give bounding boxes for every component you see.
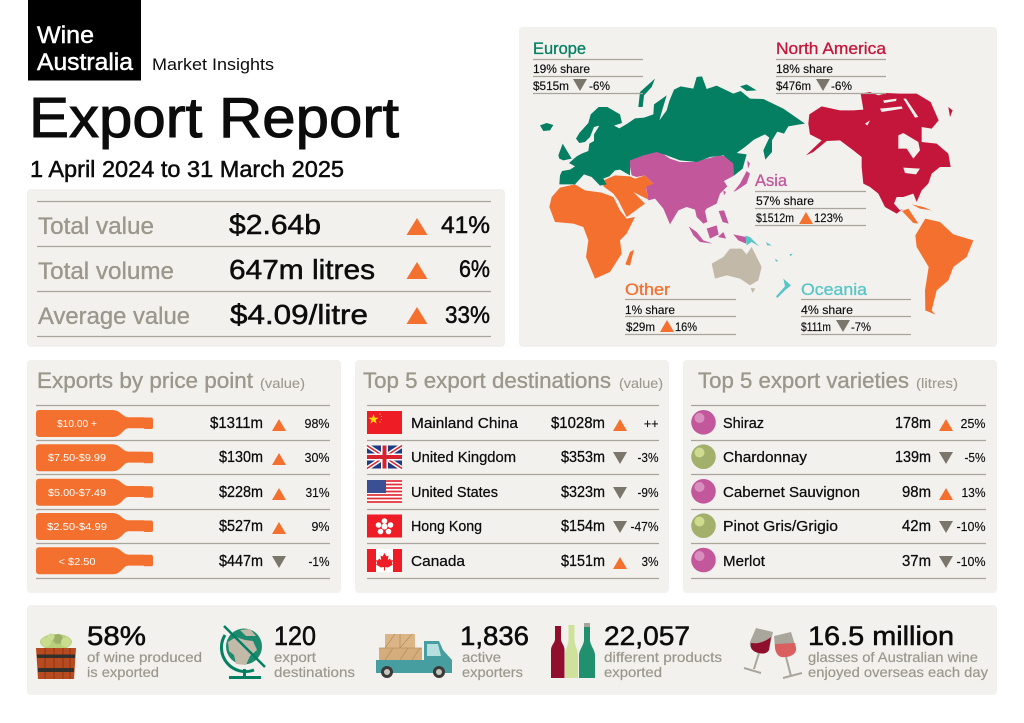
- row: Merlot: [691, 548, 986, 572]
- row: Mainland China: $1028m: [551, 415, 605, 432]
- stat: 16.5 million glasses: [808, 621, 988, 680]
- heading: top 5 export destinations: Top 5 export destinations: [363, 368, 611, 393]
- row: average value: $4.09/litre: [230, 299, 368, 330]
- heading: top 5 export varieties: (litres): [916, 375, 958, 391]
- map: Hudson Bay, arctic channels and Great Lakes: [865, 99, 920, 174]
- row: United States: United States: [411, 484, 498, 501]
- stat: 22,057 products: exported: [604, 664, 662, 680]
- row: total volume: 6%: [459, 256, 490, 283]
- flag: Hong Kong: [367, 514, 402, 538]
- logo: Wine Australia: Wine: [37, 22, 94, 49]
- row: $10.00 +: [36, 410, 330, 437]
- flag: Canada: [367, 549, 402, 572]
- callout: Europe: Europe: [533, 39, 586, 58]
- icon: wine bottles: [551, 623, 595, 678]
- callout: Oceania: 4% share: [801, 303, 853, 317]
- callout: Europe: $515m: [533, 79, 569, 93]
- region: Central and South America: [902, 204, 973, 315]
- row: United Kingdom: [367, 446, 658, 468]
- heading: exports by price point: (value): [260, 375, 305, 391]
- stat: 58% exported: of wine produced: [87, 649, 202, 665]
- callout: North America: 18% share: [776, 62, 833, 76]
- callout: Oceania: $111m: [801, 320, 831, 334]
- stat: 22,057 products: 22,057: [604, 621, 690, 651]
- row: Merlot: -10%: [956, 555, 986, 569]
- row: Hong Kong: [367, 514, 658, 538]
- stat: 120 destinations: destinations: [274, 664, 355, 680]
- row: $5.00-$7.49: 31%: [306, 486, 330, 500]
- callout: Asia: 57% share: [756, 194, 814, 208]
- icon: barrel of grapes: [36, 634, 76, 679]
- stat: 1,836 exporters: 1,836: [460, 621, 529, 651]
- callout: North America: North America: [776, 39, 887, 58]
- callout: Europe: 19% share: [533, 62, 590, 76]
- panel: top 5 export destinations: [355, 360, 669, 593]
- panel: exports by price point: [27, 360, 341, 593]
- row: Cabernet Sauvignon: 13%: [962, 486, 986, 500]
- region: Asia: [629, 152, 750, 244]
- row: United States: $323m: [561, 484, 605, 501]
- row: under $2.50: < $2.50: [58, 556, 96, 568]
- text: Market Insights: Market Insights: [152, 55, 274, 74]
- row: $5.00-$7.49: $228m: [219, 484, 263, 501]
- heading: exports by price point: Exports by price point: [37, 368, 253, 393]
- stat: 1,836 exporters: [460, 621, 529, 680]
- row: total volume: Total volume: [38, 258, 174, 285]
- row: average value: 33%: [445, 302, 490, 329]
- callout: Oceania: Oceania: [801, 280, 868, 299]
- map: world regions: [540, 76, 973, 315]
- subtitle: date range: 1 April 2024 to 31 March 2025: [30, 156, 344, 182]
- row: Shiraz: 178m: [895, 415, 931, 432]
- row: Mainland China: Mainland China: [411, 415, 519, 432]
- row: Canada: [367, 549, 658, 572]
- row: Chardonnay: -5%: [964, 451, 986, 465]
- row: Merlot: Merlot: [723, 553, 766, 570]
- heading: top 5 export destinations: (value): [619, 375, 663, 391]
- callout: Asia: $1512m: [756, 211, 794, 225]
- callout: Other: 16%: [675, 320, 697, 334]
- row: $7.50-$9.99: $130m: [219, 449, 263, 466]
- row: Cabernet Sauvignon: [691, 479, 986, 504]
- flag: China: [367, 411, 402, 434]
- logo: Wine Australia: Australia: [37, 49, 134, 76]
- row: Shiraz: Shiraz: [723, 415, 764, 432]
- row: Cabernet Sauvignon: Cabernet Sauvignon: [723, 484, 860, 501]
- callout: Other: [625, 280, 697, 334]
- row: Canada: 3%: [642, 555, 658, 569]
- row: average value: Average value: [38, 303, 190, 330]
- row: Mainland China: [367, 411, 658, 434]
- row: Shiraz: [691, 410, 986, 435]
- stat: 1,836 exporters: active: [462, 649, 501, 665]
- row: Canada: Canada: [411, 553, 466, 570]
- icon: globe: [221, 626, 265, 678]
- row: Hong Kong: $154m: [561, 518, 605, 535]
- row: $2.50-$4.99: [36, 513, 330, 540]
- row: Hong Kong: -47%: [630, 520, 658, 534]
- region: Europe and Russia: [540, 76, 805, 186]
- region: Australia: [712, 247, 762, 293]
- panel: top 5 export varieties: [683, 360, 997, 593]
- row: Pinot Gris/Grigio: [691, 513, 986, 538]
- heading: top 5 export varieties: Top 5 export varieties: [698, 368, 909, 393]
- row: $10.00 +: $1311m: [210, 415, 263, 432]
- row: Chardonnay: [691, 444, 986, 469]
- stat: 22,057 products: different products: [604, 649, 722, 665]
- row: average value: [38, 299, 490, 330]
- callout: Oceania: [801, 280, 871, 334]
- stat: 58% exported: is exported: [87, 664, 159, 680]
- row: Shiraz: 25%: [960, 417, 986, 431]
- row: Merlot: 37m: [902, 553, 931, 570]
- row: United Kingdom: -3%: [638, 451, 658, 465]
- row: Pinot Gris/Grigio: 42m: [902, 518, 931, 535]
- row: Canada: $151m: [561, 553, 605, 570]
- callout: Asia: [755, 171, 843, 225]
- stat: 16.5 million glasses: glasses of Australian wine: [808, 649, 978, 665]
- stat: 120 destinations: export: [274, 649, 316, 665]
- stat: 22,057 products: [604, 621, 722, 680]
- row: United States: -9%: [638, 486, 658, 500]
- row: total value: $2.64b: [229, 209, 321, 240]
- panel: key statistics: [27, 605, 997, 695]
- stat: 120 destinations: 120: [274, 621, 316, 651]
- icon: delivery truck: [376, 634, 452, 678]
- row: Hong Kong: Hong Kong: [411, 518, 482, 535]
- row: total volume: 647m litres: [229, 254, 375, 285]
- flag: United Kingdom: [367, 446, 402, 468]
- callout: Europe: [533, 39, 610, 93]
- callout: Other: 1% share: [625, 303, 675, 317]
- row: Mainland China: ++: [644, 417, 658, 431]
- panel: world map: [519, 27, 997, 347]
- row: United Kingdom: United Kingdom: [411, 449, 516, 466]
- row: $7.50-$9.99: 30%: [304, 451, 330, 465]
- row: $2.50-$4.99: $2.50-$4.99: [47, 521, 107, 533]
- row: $7.50-$9.99: [36, 444, 330, 471]
- row: total value: 41%: [441, 212, 490, 239]
- row: total value: [38, 209, 490, 240]
- row: Cabernet Sauvignon: 98m: [902, 484, 931, 501]
- row: total value: Total value: [38, 213, 154, 240]
- callout: North America: [776, 39, 887, 93]
- callout: Europe: -6%: [589, 79, 610, 93]
- stat: 58% exported: [87, 621, 202, 680]
- callout: North America: $476m: [776, 79, 811, 93]
- callout: Asia: 123%: [814, 211, 843, 225]
- stat: 16.5 million glasses: 16.5 million: [808, 621, 954, 651]
- row: United Kingdom: $353m: [561, 449, 605, 466]
- callout: Other: Other: [625, 280, 670, 299]
- row: $2.50-$4.99: 9%: [312, 520, 330, 534]
- title: Export Report: Export Report: [29, 86, 399, 150]
- flag: United States: [367, 480, 402, 503]
- row: total volume: [38, 254, 490, 285]
- row: under $2.50: $447m: [219, 553, 263, 570]
- stat: 120 destinations: [274, 621, 355, 680]
- row: $10.00 +: 98%: [304, 417, 330, 431]
- row: Pinot Gris/Grigio: Pinot Gris/Grigio: [723, 518, 838, 535]
- row: under $2.50: [36, 547, 330, 574]
- callout: Oceania: -7%: [851, 320, 871, 334]
- row: $10.00 +: $10.00 +: [57, 418, 97, 430]
- panel: headline totals: [27, 189, 505, 347]
- row: $7.50-$9.99: $7.50-$9.99: [48, 452, 106, 464]
- icon: clinking wine glasses: [744, 628, 802, 678]
- row: Pinot Gris/Grigio: -10%: [956, 520, 986, 534]
- row: Chardonnay: 139m: [895, 449, 931, 466]
- region: Oceania: [745, 236, 793, 298]
- row: under $2.50: -1%: [308, 555, 330, 569]
- row: $5.00-$7.49: $5.00-$7.49: [48, 487, 106, 499]
- callout: Asia: Asia: [755, 171, 788, 190]
- callout: North America: -6%: [831, 79, 852, 93]
- stat: 16.5 million glasses: enjoyed overseas each day: [808, 664, 988, 680]
- callout: Other: $29m: [626, 320, 655, 334]
- logo: Wine Australia: [28, 0, 141, 80]
- row: $2.50-$4.99: $527m: [219, 518, 263, 535]
- region: Africa and Middle East: [549, 175, 653, 279]
- row: Chardonnay: Chardonnay: [723, 449, 808, 466]
- stat: 1,836 exporters: exporters: [462, 664, 523, 680]
- stat: 58% exported: 58%: [87, 621, 146, 651]
- row: United States: [367, 480, 658, 503]
- region: North America: [806, 92, 953, 214]
- row: $5.00-$7.49: [36, 479, 330, 506]
